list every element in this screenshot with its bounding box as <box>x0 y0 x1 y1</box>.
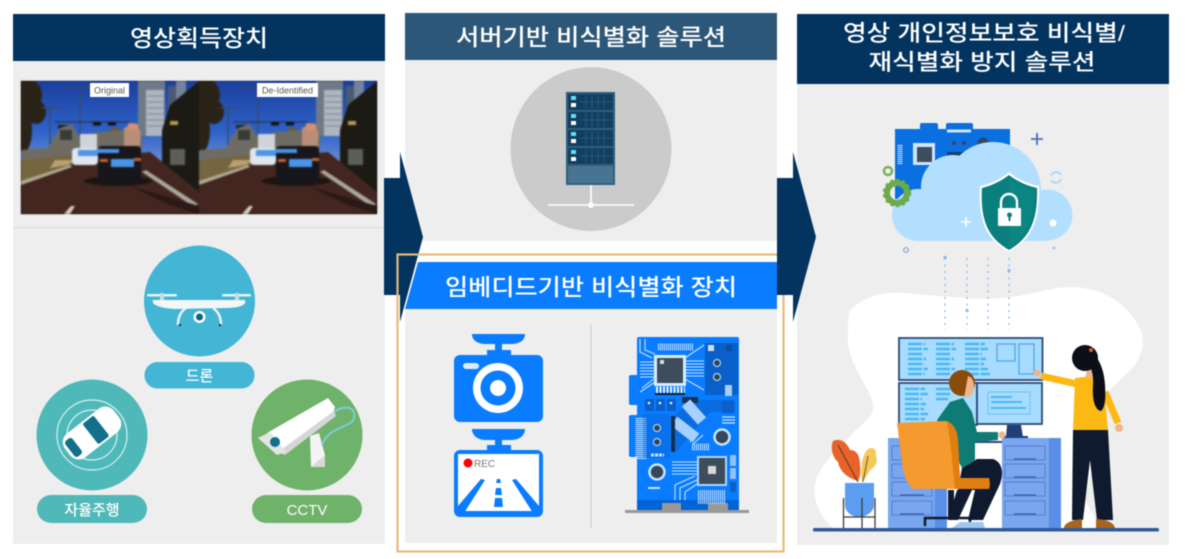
label: Original <box>90 83 129 97</box>
label: De-Identified: De-Identified <box>262 86 313 96</box>
illustration: potted plant <box>832 440 877 528</box>
icon: dash camera screen <box>454 429 543 517</box>
floor line <box>813 528 1159 532</box>
label: drone: 드론 <box>186 368 213 385</box>
illustration: monitors <box>899 338 1042 437</box>
panel: image acquisition devices <box>13 14 385 544</box>
label: CCTV: CCTV <box>287 502 327 519</box>
frame: embedded section outline <box>398 254 784 552</box>
panel: embedded de-identification device <box>405 262 777 543</box>
illustration: seated man on chair <box>897 370 1006 528</box>
label: CCTV <box>252 495 362 523</box>
label: drone <box>144 362 254 388</box>
illustration: desk with drawers <box>888 436 1061 528</box>
icon: autonomous car <box>36 380 148 490</box>
illustration: standing woman <box>1034 345 1123 528</box>
background: white blob <box>814 287 1143 528</box>
arrow: acquisition to solutions <box>384 152 423 322</box>
icon: dash camera screen: REC <box>474 459 495 470</box>
heading: server-based solution: 서버기반 비식별화 솔루션 <box>456 24 726 50</box>
label: De-Identified <box>257 83 318 97</box>
heading: privacy protection: 재식별화 방지 솔루션 <box>868 50 1096 75</box>
icon: dash camera front <box>454 334 543 422</box>
graphic: data streams <box>944 256 1010 330</box>
panel: server-based de-identification <box>405 13 777 241</box>
icon: server rack <box>510 67 672 231</box>
heading: embedded device: 임베디드기반 비식별화 장치 <box>445 274 737 300</box>
heading: privacy protection: 영상 개인정보보호 비식별/ <box>843 21 1126 46</box>
arrow: solutions to protection <box>777 152 816 322</box>
label: Original: Original <box>94 86 125 96</box>
heading: server-based solution <box>405 13 777 60</box>
divider: dotted separator <box>590 325 592 528</box>
icon: CCTV camera <box>252 380 362 490</box>
icon: cloud with circuit board <box>884 123 1072 252</box>
label: autonomous driving: 자율주행 <box>64 502 120 519</box>
heading: image acquisition: 영상획득장치 <box>130 25 268 51</box>
heading: image acquisition <box>13 14 385 61</box>
photo: original and de-identified road scene <box>14 79 377 214</box>
heading: privacy protection <box>797 14 1169 84</box>
icon: drone <box>144 246 255 356</box>
label: autonomous driving <box>37 495 147 523</box>
panel: privacy protection solution <box>797 14 1169 545</box>
icon: embedded circuit board <box>625 337 749 513</box>
icon: security shield with lock <box>980 172 1039 252</box>
heading: embedded device <box>405 262 777 309</box>
